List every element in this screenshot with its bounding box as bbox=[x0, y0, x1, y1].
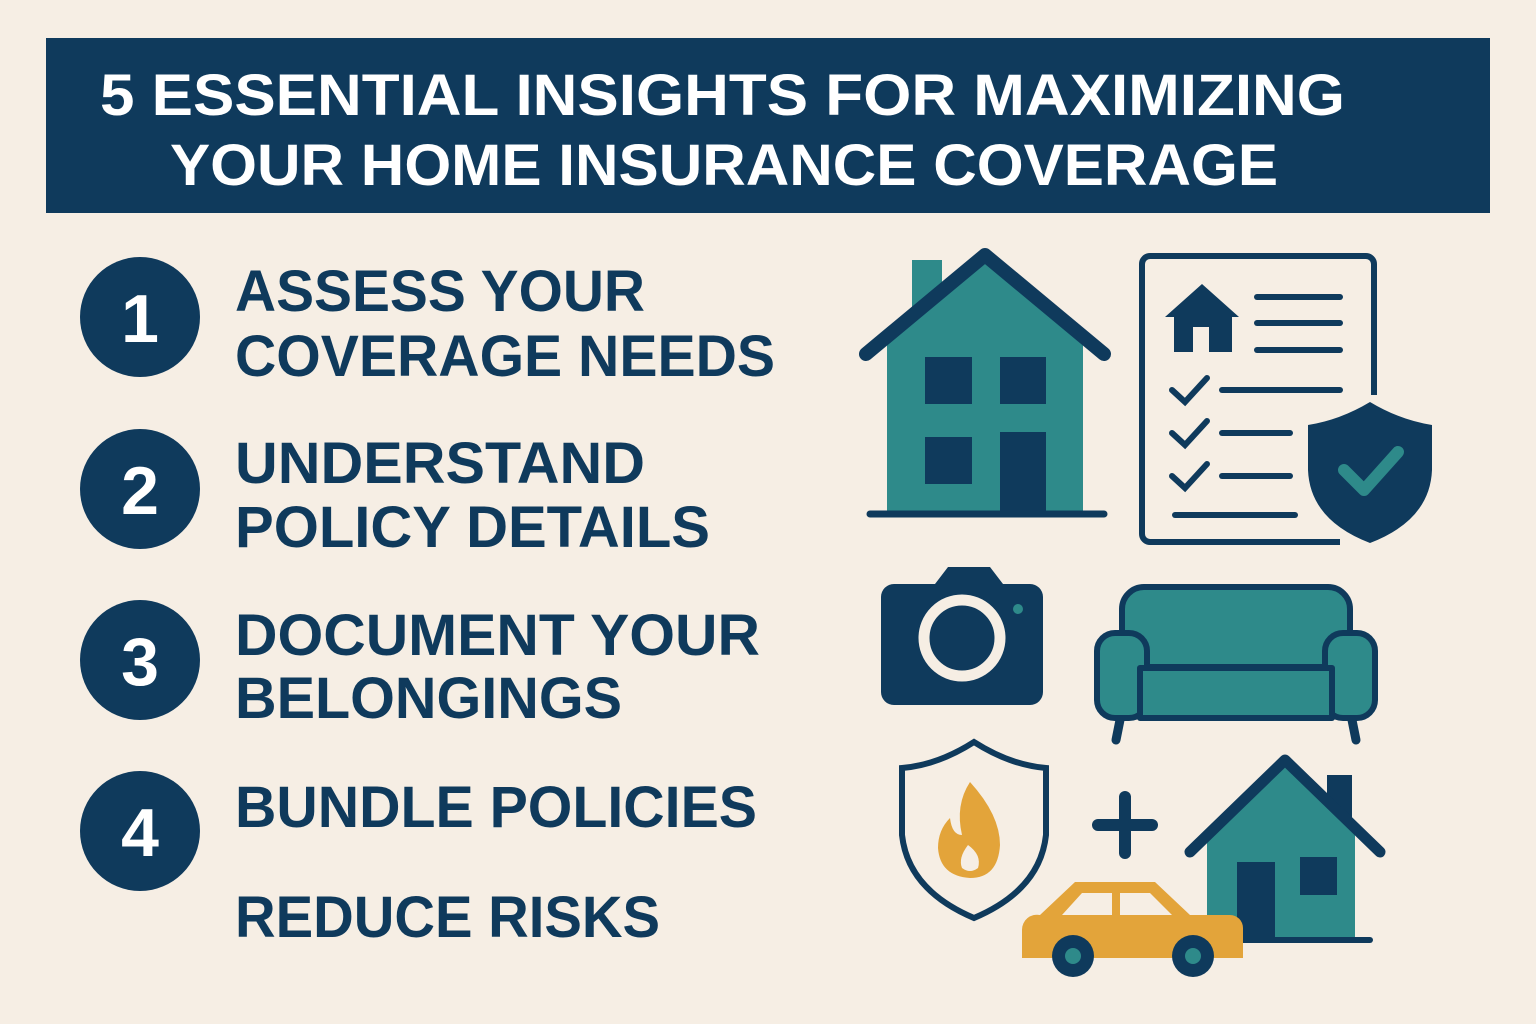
icon: plus bbox=[1098, 797, 1152, 853]
item 2 bbox=[80, 429, 710, 560]
icon: small house bbox=[1190, 760, 1380, 940]
item 5: REDUCE RISKS bbox=[235, 885, 660, 950]
item 2: POLICY DETAILS bbox=[235, 495, 710, 560]
item 1: COVERAGE NEEDS bbox=[235, 324, 775, 389]
item 2: 2 bbox=[121, 453, 159, 529]
item 1: ASSESS YOUR bbox=[235, 259, 645, 324]
icon: house bbox=[866, 255, 1104, 514]
icon: policy document with shield bbox=[1142, 256, 1432, 543]
icon: fire shield bbox=[902, 742, 1046, 918]
item 4: 4 bbox=[121, 795, 159, 871]
item 3: BELONGINGS bbox=[235, 666, 622, 731]
title banner: YOUR HOME INSURANCE COVERAGE bbox=[170, 133, 1278, 198]
item 3: DOCUMENT YOUR bbox=[235, 603, 760, 668]
item 3 bbox=[80, 600, 760, 731]
item 4 bbox=[80, 771, 757, 891]
title banner bbox=[46, 38, 1490, 213]
icon: camera bbox=[881, 567, 1043, 705]
item 1 bbox=[80, 257, 775, 389]
item 4: BUNDLE POLICIES bbox=[235, 775, 757, 840]
icon: car bbox=[1022, 882, 1243, 977]
item 1: 1 bbox=[121, 281, 159, 357]
item 2: UNDERSTAND bbox=[235, 431, 645, 496]
item 3: 3 bbox=[121, 624, 159, 700]
icon: sofa bbox=[1097, 587, 1375, 740]
title banner: 5 ESSENTIAL INSIGHTS FOR MAXIMIZING bbox=[100, 63, 1345, 128]
